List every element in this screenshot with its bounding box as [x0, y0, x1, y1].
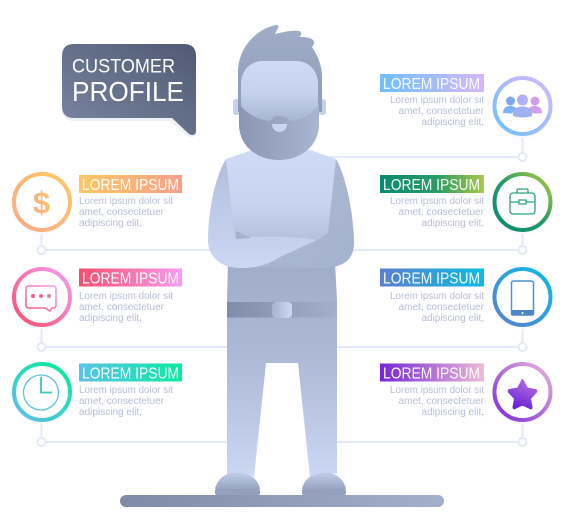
description: Lorem ipsum dolor sit [79, 385, 173, 396]
right arm [280, 159, 354, 268]
label: lorem ipsum: LOREM IPSUM [383, 177, 480, 194]
icon: people [503, 94, 542, 118]
hair [238, 25, 322, 112]
icon: speech bubble [26, 286, 56, 311]
trousers [227, 262, 337, 477]
floor [120, 495, 444, 507]
description: Lorem ipsum dolor sit [390, 385, 484, 396]
description [390, 291, 485, 324]
label: lorem ipsum: LOREM IPSUM [383, 270, 480, 288]
label: lorem ipsum: LOREM IPSUM [82, 270, 179, 288]
icon: clock [24, 375, 58, 410]
label: lorem ipsum: LOREM IPSUM [82, 177, 179, 194]
description: adipiscing elit, [422, 218, 484, 229]
mouth [272, 124, 287, 132]
description: adipiscing elit, [79, 313, 142, 324]
belt [227, 302, 337, 318]
item: favourite, right row 4 [380, 364, 552, 424]
item: finance, left row 1 [12, 174, 182, 234]
icon: briefcase [510, 189, 535, 214]
description: amet, consectetuer [398, 396, 485, 407]
item: team, right row 1 [380, 74, 552, 138]
description: amet, consectetuer [398, 106, 485, 117]
description: adipiscing elit, [422, 407, 484, 418]
description: amet, consectetuer [398, 302, 485, 313]
item: chat, left row 2 [12, 268, 182, 329]
shoes [215, 472, 346, 495]
description: amet, consectetuer [79, 207, 165, 218]
left arm [208, 159, 317, 268]
face [241, 61, 318, 140]
description: adipiscing elit, [79, 218, 142, 229]
item: time, left row 3 [12, 364, 182, 424]
description [390, 196, 485, 229]
icon: star [509, 380, 536, 408]
icon: dollar: $ [33, 185, 50, 220]
description [79, 385, 173, 418]
label: lorem ipsum: LOREM IPSUM [383, 366, 480, 382]
description: Lorem ipsum dolor sit [79, 291, 173, 302]
beard [239, 103, 319, 160]
description: amet, consectetuer [79, 302, 165, 313]
description [79, 291, 173, 324]
title [72, 56, 184, 107]
item: mobile, right row 3 [380, 268, 552, 329]
torso [226, 150, 336, 268]
crossed arm shadow [236, 231, 251, 239]
description: Lorem ipsum dolor sit [390, 196, 484, 207]
label: lorem ipsum: LOREM IPSUM [383, 76, 480, 93]
description: Lorem ipsum dolor sit [390, 95, 484, 106]
description: amet, consectetuer [398, 207, 485, 218]
icon: tablet [511, 281, 534, 316]
description: adipiscing elit, [79, 407, 142, 418]
description [390, 385, 485, 418]
description [79, 196, 173, 229]
description: amet, consectetuer [79, 396, 165, 407]
connector lines [38, 136, 526, 446]
description: Lorem ipsum dolor sit [79, 196, 173, 207]
ears [233, 99, 326, 115]
item: work, right row 2 [380, 174, 552, 234]
description: adipiscing elit, [422, 313, 484, 324]
label: lorem ipsum: LOREM IPSUM [82, 366, 179, 382]
speech bubble: customer profile [62, 44, 196, 137]
person figure [120, 25, 444, 507]
description: Lorem ipsum dolor sit [390, 291, 484, 302]
title: PROFILE [72, 76, 184, 107]
description: adipiscing elit, [422, 117, 484, 128]
description [390, 95, 485, 128]
title: CUSTOMER [72, 56, 175, 78]
